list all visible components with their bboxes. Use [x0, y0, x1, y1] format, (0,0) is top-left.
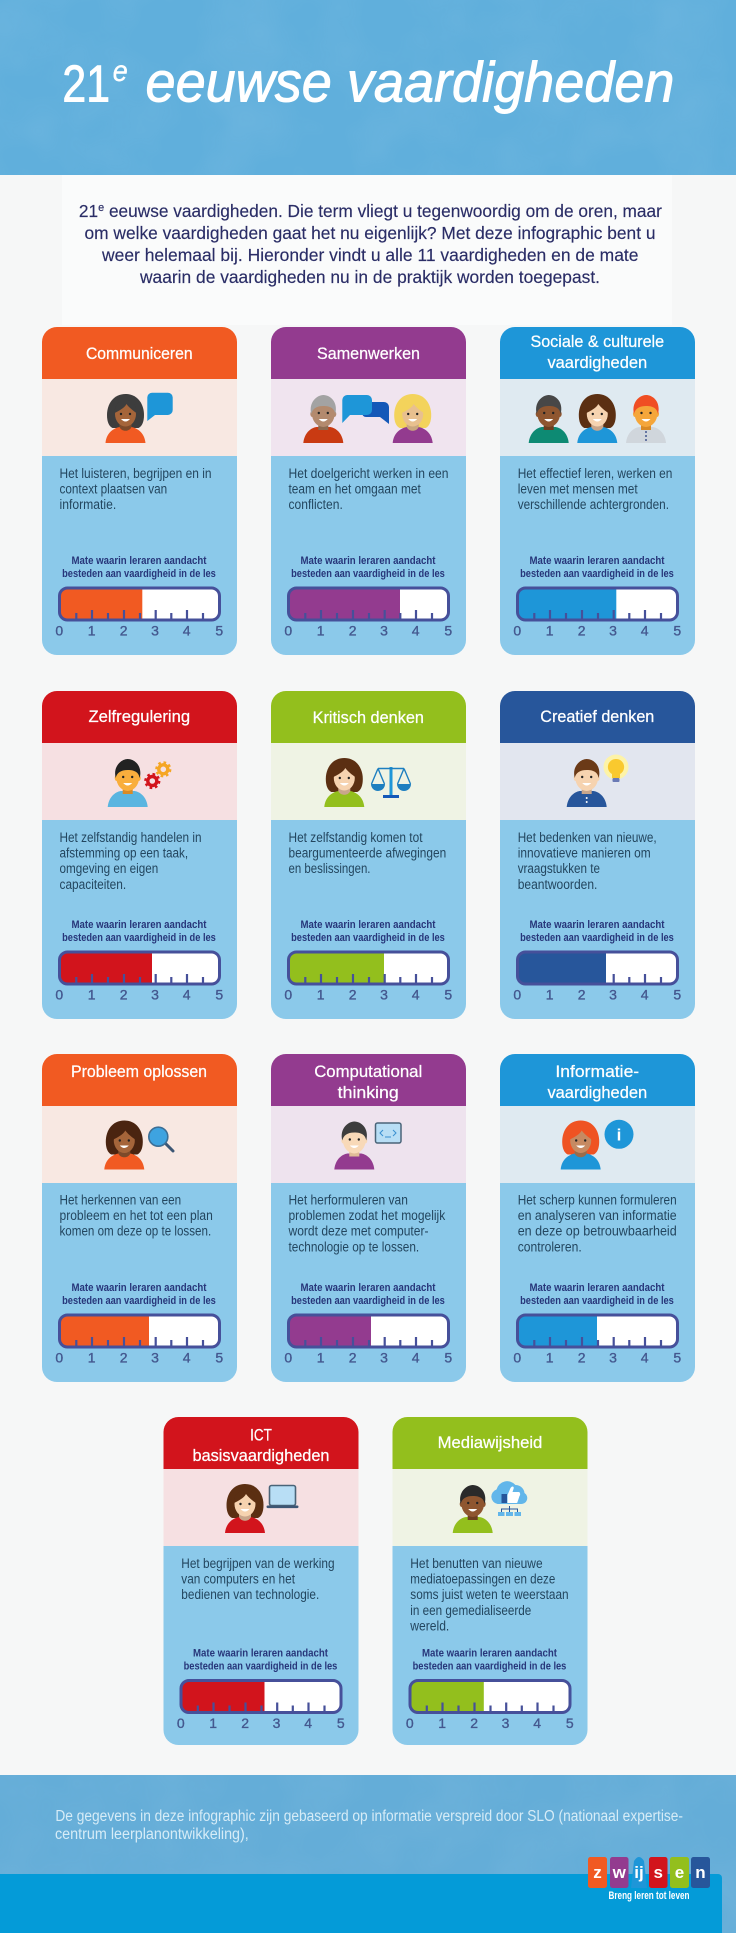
- body text: omgeving en eigen: [60, 861, 158, 876]
- body text: soms juist weten te weerstaan: [410, 1587, 569, 1602]
- body text: wereld.: [409, 1618, 449, 1633]
- meter: 2.7 of 5: 4: [641, 987, 649, 1003]
- meter: 3.6 of 5: 4: [412, 623, 420, 639]
- body text: context plaatsen van: [60, 482, 167, 497]
- body text: verschillende achtergronden.: [518, 497, 669, 512]
- body text: mediatoepassingen en deze: [410, 1572, 555, 1587]
- body text: [181, 1556, 335, 1602]
- meter: 2.8 of 5: 4: [183, 1350, 191, 1366]
- meter: 2.7 of 5: 2: [349, 1350, 357, 1366]
- body text: Het begrijpen van de werking: [181, 1556, 335, 1571]
- body text: controleren.: [518, 1239, 582, 1254]
- meter: 3.0 of 5: 2: [349, 987, 357, 1003]
- title: e: [113, 55, 128, 88]
- meter: 2.3 of 5: besteden aan vaardigheid in de les: [413, 1660, 566, 1672]
- meter: 3.6 of 5: besteden aan vaardigheid in de les: [291, 568, 445, 580]
- meter: 2.8 of 5: 3: [151, 1350, 159, 1366]
- body text: Het effectief leren, werken en: [518, 466, 672, 481]
- heading: vaardigheden: [547, 1083, 647, 1102]
- icon: man with code window: [334, 1122, 401, 1170]
- meter: 2.9 of 5: 1: [88, 987, 96, 1003]
- heading: Informatie-: [555, 1062, 639, 1081]
- heading: [192, 1426, 330, 1465]
- meter: 2.3 of 5: Mate waarin leraren aandacht: [422, 1648, 557, 1660]
- body text: team en het omgaan met: [288, 482, 421, 497]
- meter: 2.6 of 5: [55, 555, 223, 639]
- card: ICT basisvaardigheden: [164, 1417, 358, 1745]
- card: Mediawijsheid: [392, 1417, 588, 1745]
- body text: conflicten.: [288, 497, 343, 512]
- body text: innovatieve manieren om: [518, 846, 651, 861]
- body text: Het bedenken van nieuwe,: [518, 830, 657, 845]
- footer text: [55, 1808, 683, 1843]
- title: eeuwse vaardigheden: [146, 51, 674, 115]
- body text: Het herformuleren van: [288, 1192, 408, 1208]
- body text: [409, 1556, 569, 1633]
- heading: Samenwerken: [317, 344, 420, 363]
- meter: 2.8 of 5: 1: [88, 1350, 96, 1366]
- meter: 2.6 of 5: 4: [183, 623, 191, 639]
- body text: Het scherp kunnen formuleren: [518, 1192, 677, 1208]
- heading: Zelfregulering: [88, 707, 190, 726]
- meter: 3.0 of 5: Mate waarin leraren aandacht: [300, 919, 436, 931]
- meter: 3.0 of 5: 4: [412, 987, 420, 1003]
- heading: [547, 1062, 647, 1102]
- body text: en deze op betrouwbaarheid: [518, 1224, 677, 1239]
- meter: 3.6 of 5: [284, 555, 452, 639]
- meter: 2.3 of 5: 3: [502, 1715, 510, 1731]
- body text: technologie op te lossen.: [288, 1239, 419, 1254]
- body text: [518, 830, 657, 892]
- meter: 2.7 of 5: 0: [513, 987, 521, 1003]
- body text: beantwoorden.: [518, 877, 597, 892]
- meter: 2.6 of 5: besteden aan vaardigheid in de les: [184, 1660, 337, 1672]
- meter: 2.7 of 5: 5: [444, 1350, 452, 1366]
- title: 21: [62, 56, 110, 114]
- body text: leven met mensen met: [518, 482, 638, 497]
- meter: 2.5 of 5: Mate waarin leraren aandacht: [530, 1282, 665, 1294]
- intro text: eeuwse vaardigheden. Die term vliegt u tegenwoordig om de oren, maar: [104, 201, 662, 221]
- meter: 2.9 of 5: Mate waarin leraren aandacht: [72, 919, 207, 931]
- header band: [0, 0, 736, 175]
- icon: woman with magnifier: [104, 1120, 173, 1170]
- body text: wordt deze met computer-: [288, 1224, 429, 1239]
- meter: 2.5 of 5: [513, 1282, 681, 1366]
- body text: [518, 1192, 677, 1254]
- logo: zwijsen: Breng leren tot leven: [608, 1890, 690, 1902]
- meter: 3.1 of 5: 2: [578, 623, 586, 639]
- card: Informatievaardigheden: [500, 1054, 695, 1382]
- body text: bedienen van technologie.: [181, 1587, 319, 1602]
- body text: [60, 466, 212, 512]
- footer text: centrum leerplanontwikkeling),: [55, 1826, 249, 1843]
- intro text: om welke vaardigheden gaat het nu eigenlijk? Met deze infographic bent u: [84, 223, 656, 243]
- heading: basisvaardigheden: [192, 1446, 330, 1465]
- logo: zwijsen: ij: [634, 1863, 644, 1882]
- meter: 2.7 of 5: [284, 1282, 452, 1366]
- meter: 2.6 of 5: 0: [177, 1715, 185, 1731]
- intro panel: [62, 175, 672, 325]
- body text: Het benutten van nieuwe: [410, 1556, 543, 1571]
- icon: two people with speech bubbles: [303, 394, 433, 443]
- meter: 2.5 of 5: 5: [673, 1350, 681, 1366]
- meter: 3.1 of 5: 1: [546, 623, 554, 639]
- meter: 2.6 of 5: 0: [55, 623, 63, 639]
- meter: 2.3 of 5: 0: [406, 1715, 414, 1731]
- body text: [288, 466, 448, 512]
- meter: 2.5 of 5: 0: [513, 1350, 521, 1366]
- card: Communiceren: [42, 327, 237, 655]
- meter: 3.6 of 5: 1: [317, 623, 325, 639]
- meter: 2.6 of 5: besteden aan vaardigheid in de les: [62, 568, 216, 580]
- body text: [60, 1192, 213, 1239]
- body text: [60, 830, 202, 892]
- logo: zwijsen: [588, 1857, 710, 1902]
- meter: 2.6 of 5: Mate waarin leraren aandacht: [193, 1648, 328, 1660]
- body text: Het herkennen van een: [60, 1192, 181, 1208]
- meter: 2.7 of 5: [513, 919, 681, 1003]
- intro text: weer helemaal bij. Hieronder vindt u alle 11 vaardigheden en de mate: [101, 245, 639, 265]
- meter: 2.7 of 5: 4: [412, 1350, 420, 1366]
- meter: 2.9 of 5: besteden aan vaardigheid in de les: [62, 932, 216, 944]
- meter: 2.9 of 5: 3: [151, 987, 159, 1003]
- icon: woman with scales: [324, 758, 411, 807]
- body text: [518, 466, 672, 512]
- meter: 2.7 of 5: besteden aan vaardigheid in de les: [520, 932, 674, 944]
- heading: [314, 1062, 422, 1102]
- heading: Creatief denken: [540, 707, 654, 726]
- icon: woman with info sign: [561, 1120, 634, 1170]
- icon: woman with laptop: [225, 1484, 298, 1533]
- meter: 2.5 of 5: 1: [546, 1350, 554, 1366]
- meter: 3.0 of 5: 5: [444, 987, 452, 1003]
- icon: man with gears: [108, 759, 170, 807]
- meter: 2.9 of 5: [55, 919, 223, 1003]
- meter: 2.7 of 5: 3: [609, 987, 617, 1003]
- meter: 3.0 of 5: 3: [380, 987, 388, 1003]
- meter: 3.0 of 5: besteden aan vaardigheid in de les: [291, 932, 445, 944]
- meter: 2.9 of 5: 4: [183, 987, 191, 1003]
- icon: woman with speech bubble: [106, 393, 173, 443]
- heading: vaardigheden: [547, 353, 647, 372]
- meter: 2.7 of 5: 0: [284, 1350, 292, 1366]
- icon: three people: [529, 394, 666, 443]
- meter: 2.6 of 5: 5: [337, 1715, 345, 1731]
- meter: 2.8 of 5: 0: [55, 1350, 63, 1366]
- intro text: e: [98, 202, 104, 214]
- meter: 2.7 of 5: besteden aan vaardigheid in de les: [291, 1295, 445, 1307]
- icon: man with light bulb: [567, 754, 628, 807]
- meter: 2.6 of 5: [177, 1648, 345, 1731]
- body text: van computers en het: [181, 1572, 295, 1587]
- meter: 3.0 of 5: 1: [317, 987, 325, 1003]
- heading: thinking: [338, 1083, 399, 1102]
- body text: [288, 830, 446, 876]
- card: Samenwerken: [271, 327, 466, 655]
- heading: Mediawijsheid: [438, 1433, 542, 1452]
- footer band: [0, 1775, 736, 1933]
- logo: zwijsen: w: [612, 1863, 627, 1882]
- meter: 2.7 of 5: 5: [673, 987, 681, 1003]
- card: Computational thinking: [271, 1054, 466, 1382]
- meter: 2.3 of 5: 1: [438, 1715, 446, 1731]
- meter: 3.1 of 5: besteden aan vaardigheid in de les: [520, 568, 674, 580]
- meter: 2.3 of 5: 5: [566, 1715, 574, 1731]
- meter: 2.7 of 5: 1: [317, 1350, 325, 1366]
- logo: zwijsen: z: [593, 1863, 602, 1882]
- meter: 2.6 of 5: 4: [304, 1715, 312, 1731]
- body text: vraagstukken te: [518, 861, 600, 876]
- meter: 3.1 of 5: 0: [513, 623, 521, 639]
- meter: 3.6 of 5: 2: [349, 623, 357, 639]
- meter: 2.7 of 5: 2: [578, 987, 586, 1003]
- meter: 3.6 of 5: 5: [444, 623, 452, 639]
- meter: 2.8 of 5: 2: [120, 1350, 128, 1366]
- heading: [530, 332, 664, 372]
- heading: Kritisch denken: [313, 708, 424, 727]
- card: Zelfregulering: [42, 691, 237, 1019]
- logo: zwijsen: n: [695, 1863, 706, 1882]
- meter: 2.9 of 5: 2: [120, 987, 128, 1003]
- meter: 2.7 of 5: Mate waarin leraren aandacht: [530, 919, 665, 931]
- card: Probleem oplossen: [42, 1054, 237, 1382]
- body text: komen om deze op te lossen.: [60, 1224, 211, 1239]
- meter: 2.5 of 5: 3: [609, 1350, 617, 1366]
- body text: beargumenteerde afwegingen: [288, 846, 446, 861]
- meter: 2.8 of 5: 5: [215, 1350, 223, 1366]
- icon: man with social cloud: [453, 1481, 527, 1533]
- meter: 3.1 of 5: 5: [673, 623, 681, 639]
- meter: 2.5 of 5: besteden aan vaardigheid in de les: [520, 1295, 674, 1307]
- meter: 2.6 of 5: 2: [241, 1715, 249, 1731]
- meter: 2.6 of 5: 1: [88, 623, 96, 639]
- meter: 3.6 of 5: 3: [380, 623, 388, 639]
- body text: en beslissingen.: [288, 861, 370, 876]
- body text: informatie.: [60, 497, 116, 512]
- intro text: waarin de vaardigheden nu in de praktijk worden toegepast.: [139, 267, 600, 287]
- body text: capaciteiten.: [60, 877, 126, 892]
- meter: 3.1 of 5: [513, 555, 681, 639]
- meter: 2.5 of 5: 2: [578, 1350, 586, 1366]
- meter: 3.0 of 5: [284, 919, 452, 1003]
- meter: 2.6 of 5: 1: [209, 1715, 217, 1731]
- icon: woman with info sign: i: [617, 1126, 621, 1144]
- intro text: 21: [79, 201, 98, 221]
- meter: 2.6 of 5: 5: [215, 623, 223, 639]
- meter: 2.7 of 5: Mate waarin leraren aandacht: [300, 1282, 436, 1294]
- body text: en analyseren van informatie: [518, 1208, 677, 1223]
- intro text: [79, 201, 662, 287]
- logo: zwijsen: e: [675, 1863, 684, 1882]
- body text: [288, 1192, 445, 1254]
- body text: Het zelfstandig handelen in: [60, 830, 202, 845]
- meter: 2.6 of 5: 2: [120, 623, 128, 639]
- body text: Het luisteren, begrijpen en in: [60, 466, 212, 481]
- body text: probleem en het tot een plan: [60, 1208, 213, 1223]
- meter: 2.3 of 5: 4: [533, 1715, 541, 1731]
- card: Creatief denken: [500, 691, 695, 1019]
- meter: 3.1 of 5: 4: [641, 623, 649, 639]
- meter: 2.6 of 5: 3: [151, 623, 159, 639]
- body text: Het zelfstandig komen tot: [288, 830, 423, 845]
- meter: 3.0 of 5: 0: [284, 987, 292, 1003]
- meter: 2.3 of 5: 2: [470, 1715, 478, 1731]
- body text: in een gemedialiseerde: [410, 1603, 531, 1618]
- meter: 2.9 of 5: 5: [215, 987, 223, 1003]
- meter: 2.6 of 5: 3: [273, 1715, 281, 1731]
- meter: 2.3 of 5: [406, 1648, 574, 1731]
- meter: 3.1 of 5: 3: [609, 623, 617, 639]
- meter: 3.6 of 5: 0: [284, 623, 292, 639]
- heading: Communiceren: [86, 344, 193, 363]
- meter: 2.7 of 5: 1: [546, 987, 554, 1003]
- heading: Computational: [314, 1062, 422, 1081]
- body text: Het doelgericht werken in een: [288, 466, 448, 481]
- meter: 2.9 of 5: 0: [55, 987, 63, 1003]
- meter: 2.8 of 5: besteden aan vaardigheid in de les: [62, 1295, 216, 1307]
- logo: zwijsen: s: [653, 1863, 663, 1882]
- body text: problemen zodat het mogelijk: [288, 1208, 445, 1223]
- meter: 2.7 of 5: 3: [380, 1350, 388, 1366]
- meter: 2.8 of 5: Mate waarin leraren aandacht: [72, 1282, 207, 1294]
- card: Kritisch denken: [271, 691, 466, 1019]
- meter: 2.6 of 5: Mate waarin leraren aandacht: [72, 555, 207, 567]
- card: Sociale & culturele vaardigheden: [500, 327, 695, 655]
- meter: 2.8 of 5: [55, 1282, 223, 1366]
- heading: ICT: [250, 1426, 272, 1445]
- meter: 3.6 of 5: Mate waarin leraren aandacht: [300, 555, 436, 567]
- meter: 3.1 of 5: Mate waarin leraren aandacht: [530, 555, 665, 567]
- meter: 2.5 of 5: 4: [641, 1350, 649, 1366]
- heading: Probleem oplossen: [71, 1062, 207, 1081]
- heading: Sociale & culturele: [530, 332, 664, 351]
- body text: afstemming op een taak,: [60, 846, 188, 861]
